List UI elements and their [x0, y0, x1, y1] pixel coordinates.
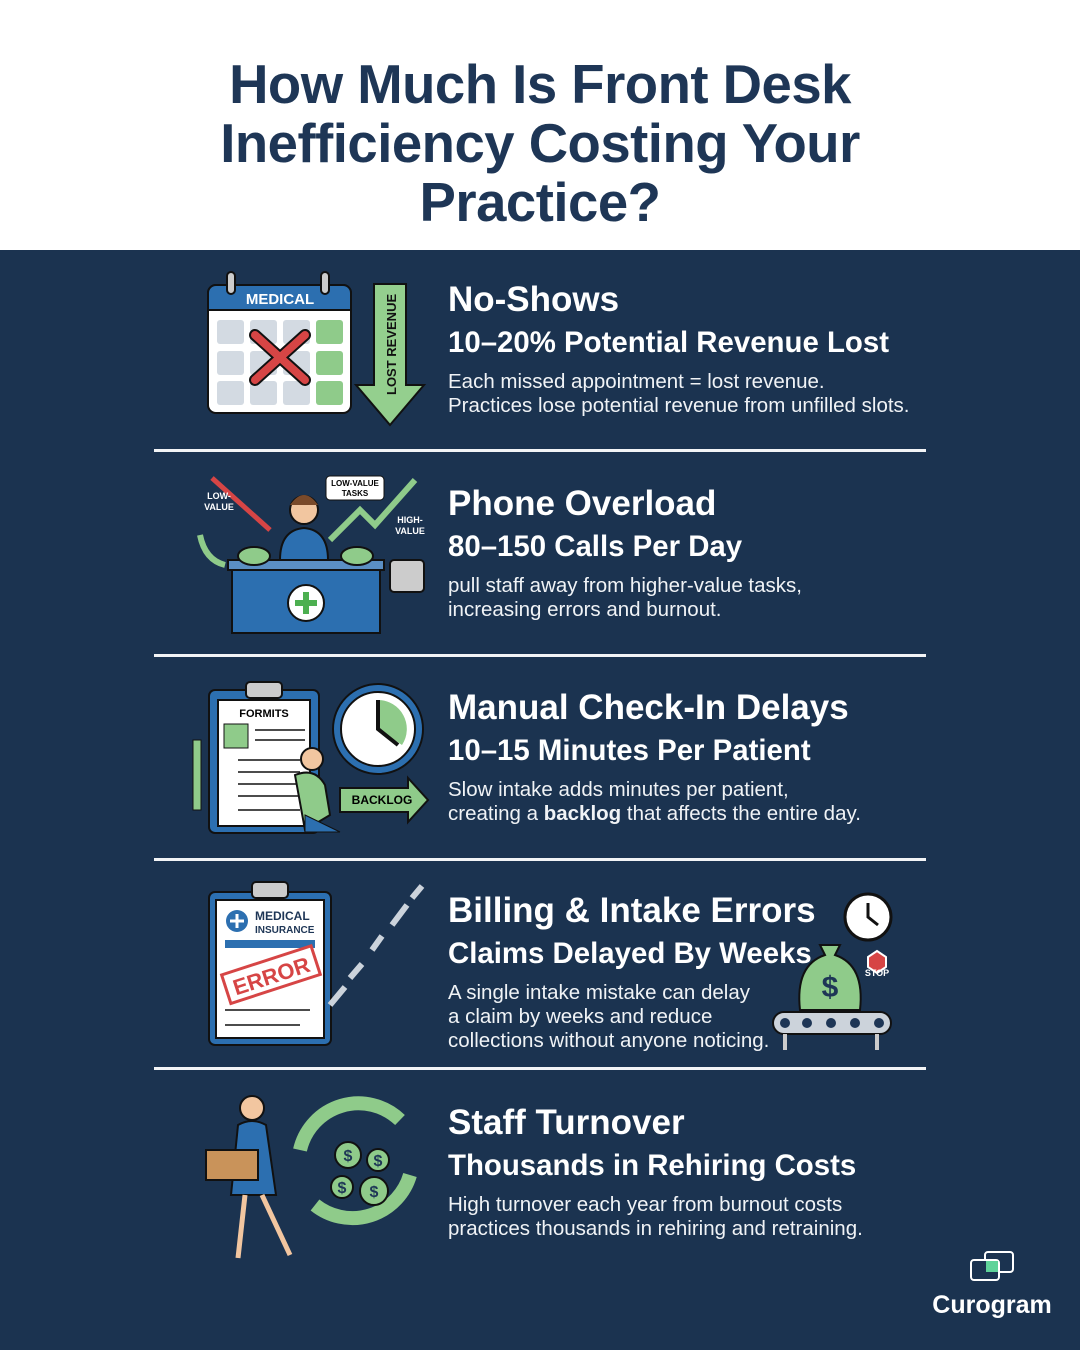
person: [295, 748, 340, 832]
title: [220, 54, 860, 233]
text: check-in: Slow intake adds minutes per patient,: [448, 778, 789, 801]
title: Practice?: [420, 172, 660, 233]
text: billing: [448, 891, 816, 1052]
arrows: LOW-VALUE: [331, 479, 380, 488]
icon: recycle dollars: $: [370, 1184, 379, 1201]
icon: insurance clipboard: MEDICAL: [255, 909, 310, 923]
text: billing: collections without anyone noticing.: [448, 1029, 769, 1052]
icon: desk: [228, 560, 384, 633]
panel: staff turnover icon: [205, 1095, 417, 1258]
icon: money bag conveyor: STOP: [865, 968, 889, 978]
text: billing: Claims Delayed By Weeks: [448, 937, 812, 970]
text: billing: Billing & Intake Errors: [448, 891, 816, 930]
icon: backlog arrow: BACKLOG: [352, 793, 412, 807]
text: staff turnover: Thousands in Rehiring Costs: [448, 1149, 856, 1182]
icon: broken chain: [330, 886, 422, 1005]
title band: [0, 0, 1080, 250]
arrows: LOW-: [207, 491, 231, 501]
icon: money bag conveyor: [772, 892, 892, 1050]
icon: clipboard form: FORMITS: [239, 708, 289, 720]
text: no-shows: 10–20% Potential Revenue Lost: [448, 326, 889, 359]
text: billing: A single intake mistake can delay: [448, 981, 750, 1004]
panel: billing icon: [208, 881, 424, 1046]
panel: phone overload icon: [197, 476, 425, 634]
icon: insurance clipboard: INSURANCE: [255, 925, 315, 936]
icon: clock: [333, 684, 423, 774]
icon: insurance clipboard: ERROR: [230, 952, 313, 1000]
icon: lost revenue arrow: LOST REVENUE: [384, 294, 399, 395]
text: phone overload: Phone Overload: [448, 484, 716, 523]
arrows: TASKS: [342, 489, 369, 498]
text: phone overload: pull staff away from higher-value tasks,: [448, 574, 802, 597]
icon: money bag conveyor: $: [822, 971, 839, 1004]
text: check-in: creating a backlog that affects the entire day.: [448, 802, 861, 825]
text: no-shows: [448, 280, 909, 417]
icon: recycle dollars: [300, 1103, 410, 1218]
icon: recycle dollars: $: [374, 1153, 383, 1170]
text: check-in: 10–15 Minutes Per Patient: [448, 734, 811, 767]
text: staff turnover: Staff Turnover: [448, 1103, 685, 1142]
arrows: VALUE: [204, 502, 234, 512]
text: no-shows: Practices lose potential revenue from unfilled slots.: [448, 394, 909, 417]
icon: calendar: [208, 272, 351, 413]
icon: recycle dollars: $: [338, 1180, 347, 1197]
text: phone overload: [448, 484, 802, 621]
icon: insurance clipboard: [209, 882, 331, 1045]
text: check-in: Manual Check-In Delays: [448, 688, 849, 727]
arrows: [204, 476, 425, 540]
icon: phones: [200, 535, 424, 592]
icon: person with box: [206, 1096, 290, 1258]
logo: Curogram: [932, 1251, 1052, 1319]
text: phone overload: 80–150 Calls Per Day: [448, 530, 742, 563]
icon: recycle dollars: $: [344, 1148, 353, 1165]
text: phone overload: increasing errors and burnout.: [448, 598, 722, 621]
text: check-in: [448, 688, 861, 825]
panel: check-in icon: [192, 681, 430, 834]
arrows: VALUE: [395, 526, 425, 536]
title: Inefficiency Costing Your: [220, 113, 860, 174]
icon: lost revenue arrow: [356, 284, 424, 425]
icon: calendar: MEDICAL: [246, 291, 314, 308]
title: How Much Is Front Desk: [229, 54, 851, 115]
icon: backlog arrow: [340, 778, 428, 822]
text: staff turnover: High turnover each year from burnout costs: [448, 1193, 842, 1216]
icon: receptionist: [280, 495, 328, 560]
panel: no-shows: [207, 271, 426, 426]
text: billing: a claim by weeks and reduce: [448, 1005, 712, 1028]
logo: Curogram: Curogram: [932, 1291, 1052, 1319]
icon: clipboard form: [193, 682, 319, 833]
text: staff turnover: [448, 1103, 863, 1240]
text: staff turnover: practices thousands in rehiring and retraining.: [448, 1217, 863, 1240]
text: no-shows: No-Shows: [448, 280, 619, 319]
text: no-shows: Each missed appointment = lost revenue.: [448, 370, 825, 393]
arrows: HIGH-: [397, 515, 423, 525]
